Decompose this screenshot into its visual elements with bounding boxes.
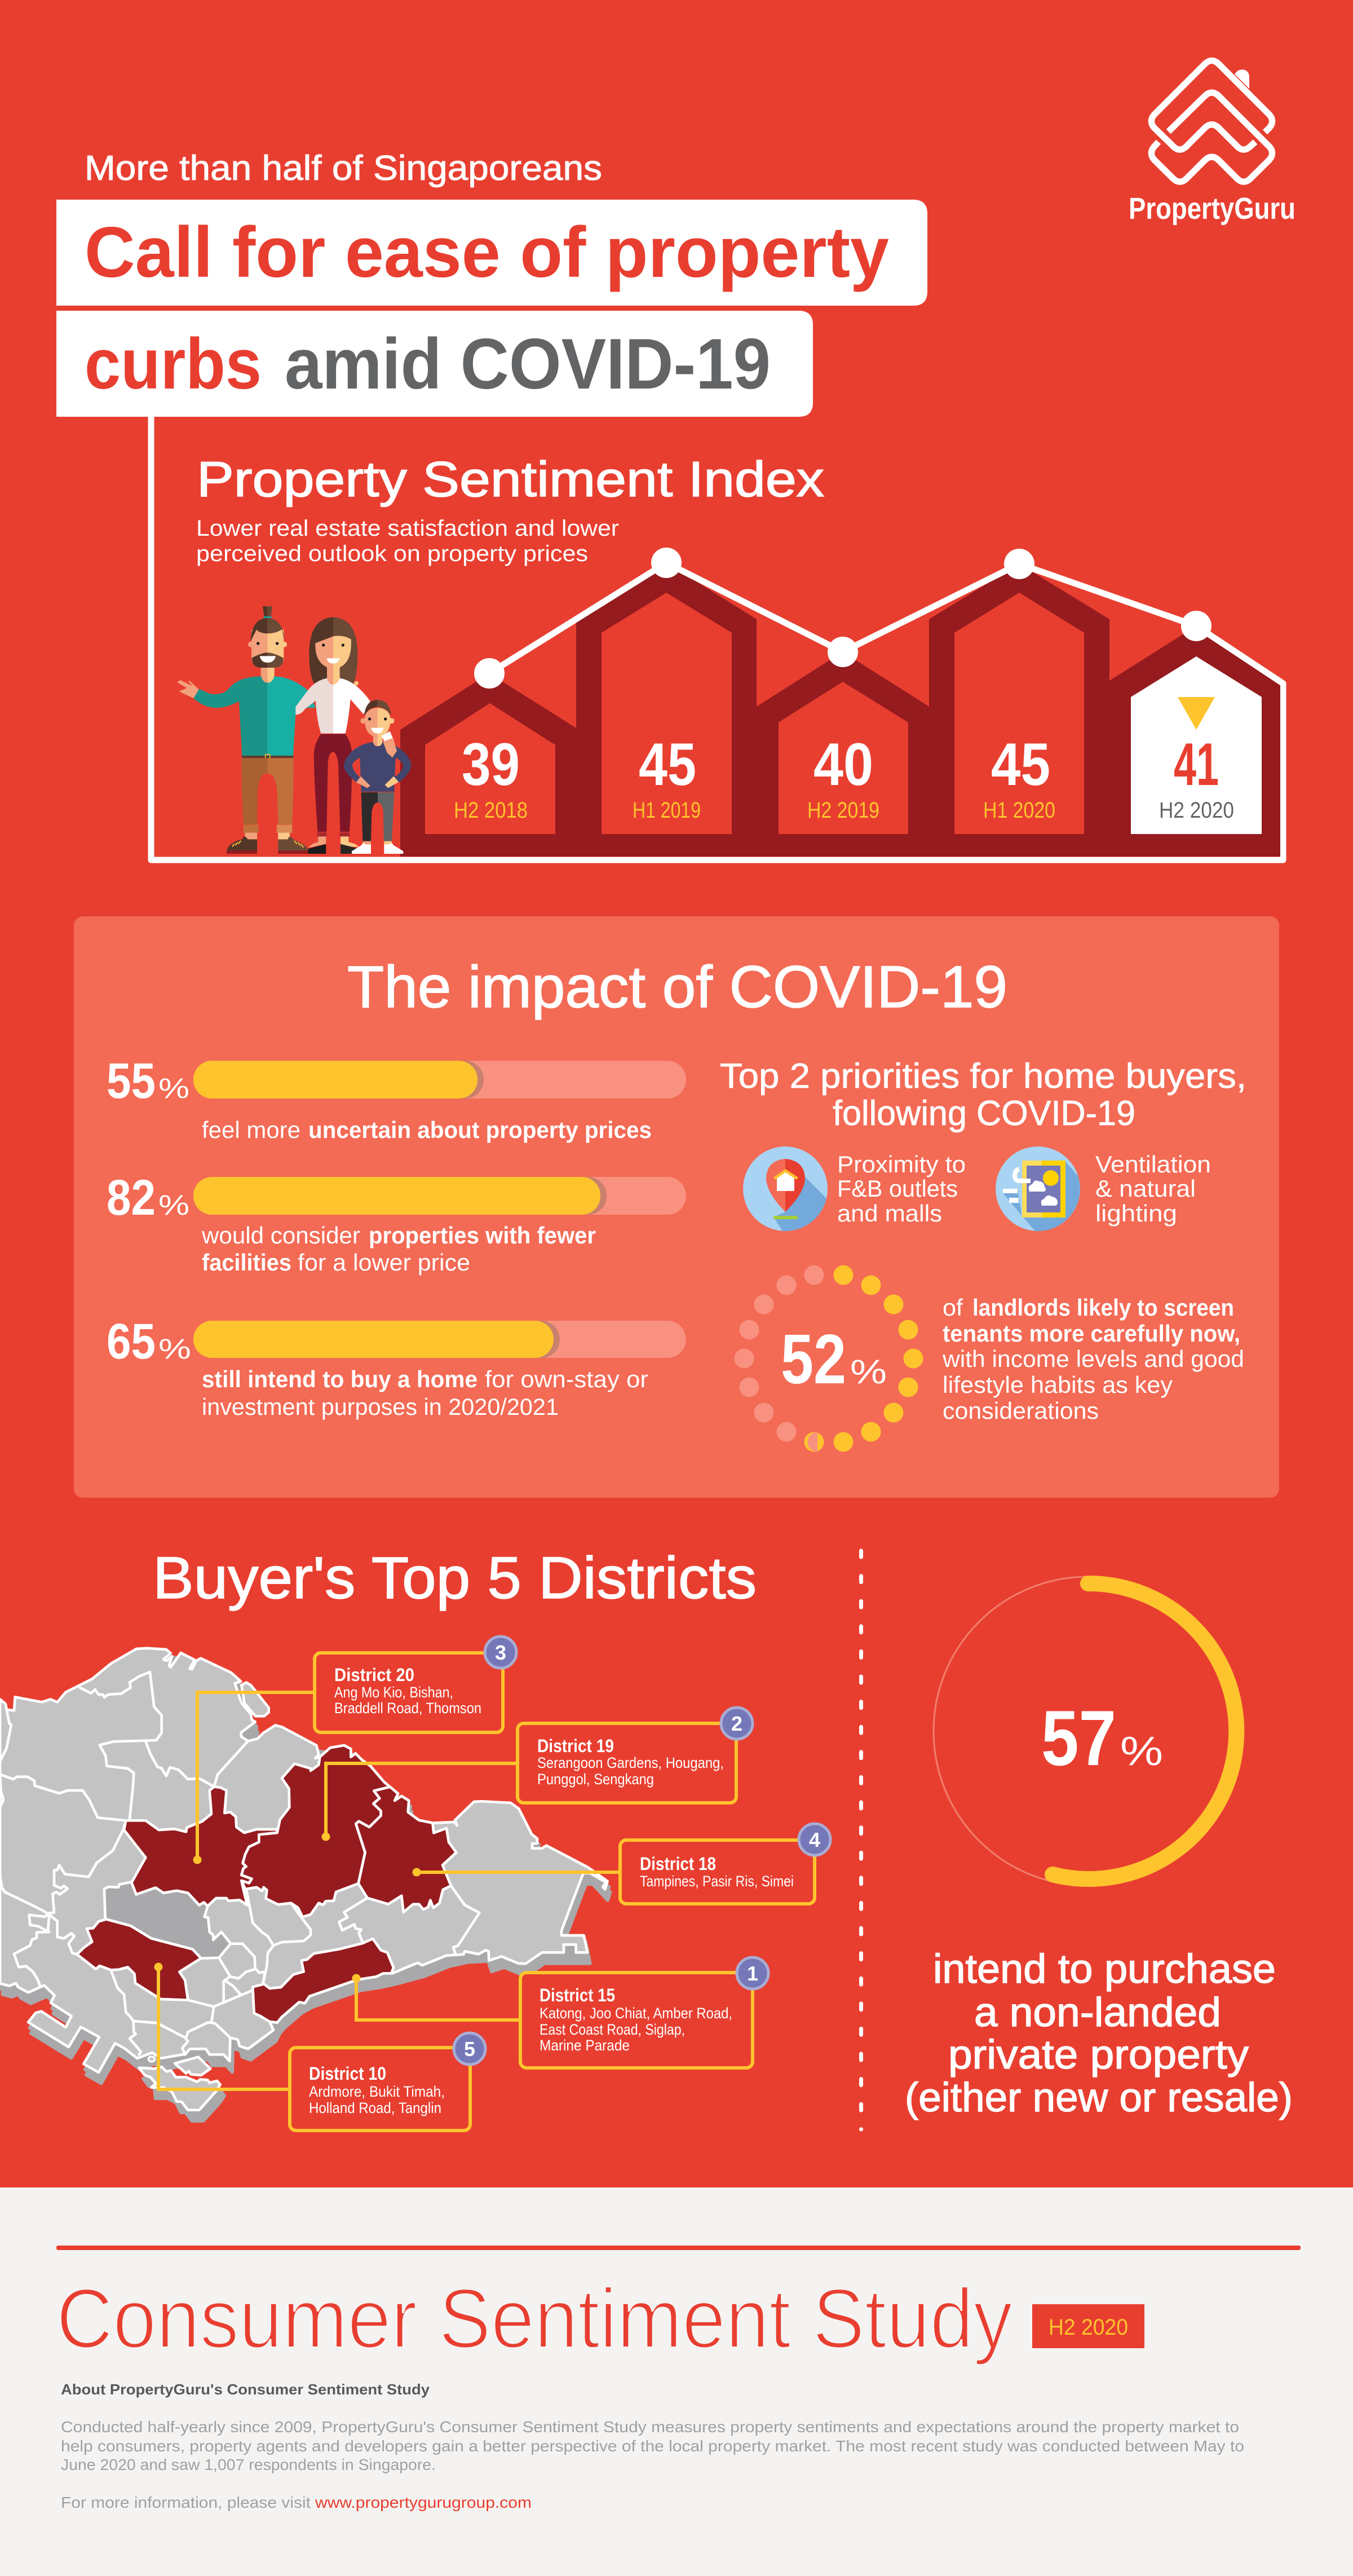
map: district 15: [253, 1939, 393, 2023]
callout: district 19: Punggol, Sengkang: [537, 1771, 654, 1788]
woman: [295, 636, 370, 854]
stat: 55% bar: 55: [107, 1052, 156, 1109]
about text: [61, 2418, 1244, 2511]
heading: Property Sentiment Index: Property Sentiment Index: [197, 451, 824, 507]
title line 1: Call for ease of property: [85, 212, 889, 292]
stat: 82% bar: 82: [107, 1169, 156, 1225]
callout: district 19: [321, 1708, 753, 1841]
map land: [0, 1648, 608, 2110]
heading: top 2 priorities: [720, 1057, 1246, 1133]
chart: 57% ring: [934, 1577, 1243, 1886]
subheading: [196, 516, 619, 566]
about text: June 2020 and saw 1,007 respondents in Singapore.: [61, 2456, 436, 2473]
stat: 65% bar: investment purposes in 2020/2021: [202, 1393, 559, 1420]
illustration: family: [177, 606, 411, 854]
stat: 55% bar: %: [158, 1073, 189, 1104]
text: landlords: tenants more carefully now,: [943, 1320, 1240, 1347]
heading: impact: The impact of COVID-19: [347, 954, 1007, 1020]
house chart: 41: [1174, 730, 1219, 798]
stat: 65% bar: [107, 1313, 686, 1420]
stat: 65% bar: still intend to buy a home: [202, 1366, 477, 1392]
callout: district 19: District 19: [537, 1736, 614, 1756]
chart: 52% dot ring: 52: [781, 1321, 846, 1399]
woman hair: [309, 617, 359, 686]
stat: 65% bar: %: [158, 1333, 191, 1365]
heading: top 2 priorities: following COVID-19: [833, 1094, 1135, 1133]
map: district 10: [77, 1919, 201, 2000]
subheading: perceived outlook on property prices: [196, 541, 588, 566]
edition badge: H2 2020: [1049, 2315, 1128, 2340]
house chart: H2 2020: [1159, 798, 1234, 823]
callout: district 18: Tampines, Pasir Ris, Simei: [640, 1873, 794, 1890]
text: ventilation: lighting: [1095, 1200, 1177, 1227]
heading: top 2 priorities: Top 2 priorities for home buyers,: [720, 1057, 1246, 1096]
callout: district 20: [193, 1637, 516, 1864]
man: [177, 606, 316, 854]
stat: 65% bar: for own-stay or: [485, 1366, 648, 1392]
callout: district 20: Ang Mo Kio, Bishan,: [334, 1684, 453, 1701]
text: non-landed stat: private property: [948, 2032, 1249, 2077]
footer title: Consumer Sentiment Study: [56, 2271, 1012, 2366]
house chart: H1 2019: [633, 798, 701, 823]
text: landlords: landlords likely to screen: [972, 1294, 1234, 1321]
heading: Buyer's Top 5 Districts: Buyer's Top 5 Districts: [153, 1545, 757, 1611]
text: non-landed stat: (either new or resale): [905, 2075, 1293, 2120]
callout: district 19: 2: [731, 1712, 742, 1735]
text: ventilation: & natural: [1095, 1175, 1196, 1202]
about heading: About PropertyGuru's Consumer Sentiment Study: [61, 2381, 430, 2398]
callout: district 10: [154, 1962, 485, 2131]
house chart: 45: [991, 730, 1050, 798]
logo: PropertyGuru: PropertyGuru: [1129, 192, 1295, 226]
text: landlords: considerations: [943, 1397, 1099, 1424]
panel: the impact of COVID-19: [74, 916, 1279, 1498]
stat: 82% bar: for a lower price: [298, 1249, 470, 1276]
stat: 55% bar: feel more: [202, 1117, 300, 1143]
text: proximity: [837, 1151, 966, 1227]
callout: district 10: Ardmore, Bukit Timah,: [309, 2083, 445, 2100]
about text: help consumers, property agents and developers gain a better perspective of the local property market. The most recent study was conducted between May to: [61, 2437, 1244, 2455]
callout: district 15: Marine Parade: [540, 2037, 630, 2054]
stat: 55% bar: [107, 1052, 686, 1143]
house chart: [400, 548, 1283, 857]
callout: district 10: Holland Road, Tanglin: [309, 2099, 441, 2116]
stat: 82% bar: properties with fewer: [369, 1222, 596, 1249]
boy: [344, 700, 411, 854]
callout: district 10: 5: [464, 2037, 475, 2061]
text: ventilation: Ventilation: [1095, 1151, 1211, 1177]
icon: window: [996, 1146, 1080, 1231]
text: ventilation: [1095, 1151, 1211, 1227]
callout: district 20: District 20: [334, 1665, 414, 1685]
map shadow: [2, 1654, 610, 2121]
text: landlords: lifestyle habits as key: [943, 1371, 1173, 1398]
title line 2: amid COVID-19: [285, 324, 771, 404]
callout: district 20: 3: [495, 1641, 506, 1664]
logo: PropertyGuru: [1129, 60, 1295, 226]
house chart: 40: [813, 730, 873, 798]
callout: district 20: Braddell Road, Thomson: [334, 1700, 481, 1717]
map of Singapore: [0, 1648, 610, 2121]
chart: 52% dot ring: [734, 1265, 923, 1452]
kicker text: More than half of Singaporeans: [85, 149, 602, 188]
title line 2: curbs: [85, 324, 262, 404]
edition badge: [1032, 2304, 1144, 2348]
stat: 82% bar: facilities: [202, 1249, 291, 1276]
map: district 20: [124, 1787, 277, 1906]
text: non-landed stat: [905, 1947, 1293, 2120]
map internal boundaries: [0, 1672, 479, 2054]
stat: 82% bar: %: [158, 1189, 189, 1221]
callout: district 15: District 15: [540, 1985, 615, 2005]
about text: For more information, please visit: [61, 2494, 311, 2511]
house chart: 45: [639, 730, 696, 798]
map: lighter region: [104, 1882, 231, 1959]
callout: district 15: East Coast Road, Siglap,: [540, 2021, 685, 2038]
callout: district 18: 4: [809, 1828, 820, 1851]
text: landlords: with income levels and good: [942, 1346, 1244, 1372]
stat: 82% bar: would consider: [201, 1222, 360, 1249]
text: landlords: [942, 1294, 1244, 1424]
frame line of the sentiment index: [151, 417, 1283, 860]
stat: 82% bar: [107, 1169, 686, 1276]
text: proximity: Proximity to: [837, 1151, 966, 1177]
text: proximity: and malls: [837, 1200, 942, 1227]
about text: Conducted half-yearly since 2009, PropertyGuru's Consumer Sentiment Study measures property sentiments and expectations around the property market to: [61, 2418, 1239, 2436]
map: district 19: [241, 1745, 390, 1917]
dotted divider: [859, 1551, 863, 2129]
map: district 18: [356, 1787, 456, 1912]
stat: 55% bar: uncertain about property prices: [308, 1117, 652, 1143]
house chart: H1 2020: [983, 798, 1055, 823]
callout: district 15: 1: [747, 1962, 758, 1985]
callout: district 18: [413, 1824, 830, 1904]
icon: location pin: [743, 1146, 828, 1231]
callout: district 10: District 10: [309, 2063, 386, 2084]
text: landlords: of: [943, 1294, 963, 1321]
house chart: H2 2019: [807, 798, 879, 823]
callout: district 19: Serangoon Gardens, Hougang,: [537, 1754, 724, 1771]
text: proximity: F&B outlets: [837, 1175, 958, 1202]
subheading: Lower real estate satisfaction and lower: [196, 516, 619, 541]
title line 2: [56, 311, 813, 417]
chart: 52% dot ring: %: [850, 1353, 887, 1391]
footer panel: [0, 2187, 1353, 2576]
callout: district 18: District 18: [640, 1854, 716, 1874]
chart: 57% ring: %: [1120, 1729, 1163, 1774]
chart: 57% ring: 57: [1041, 1695, 1116, 1782]
callout: district 15: [352, 1957, 768, 2068]
stat: 65% bar: 65: [107, 1313, 156, 1369]
about text: www.propertygurugroup.com: [315, 2494, 532, 2511]
house chart: 39: [462, 730, 520, 798]
text: non-landed stat: a non-landed: [974, 1990, 1221, 2035]
house chart: H2 2018: [454, 798, 528, 823]
text: non-landed stat: intend to purchase: [933, 1947, 1276, 1992]
callout: district 15: Katong, Joo Chiat, Amber Road,: [540, 2005, 732, 2022]
